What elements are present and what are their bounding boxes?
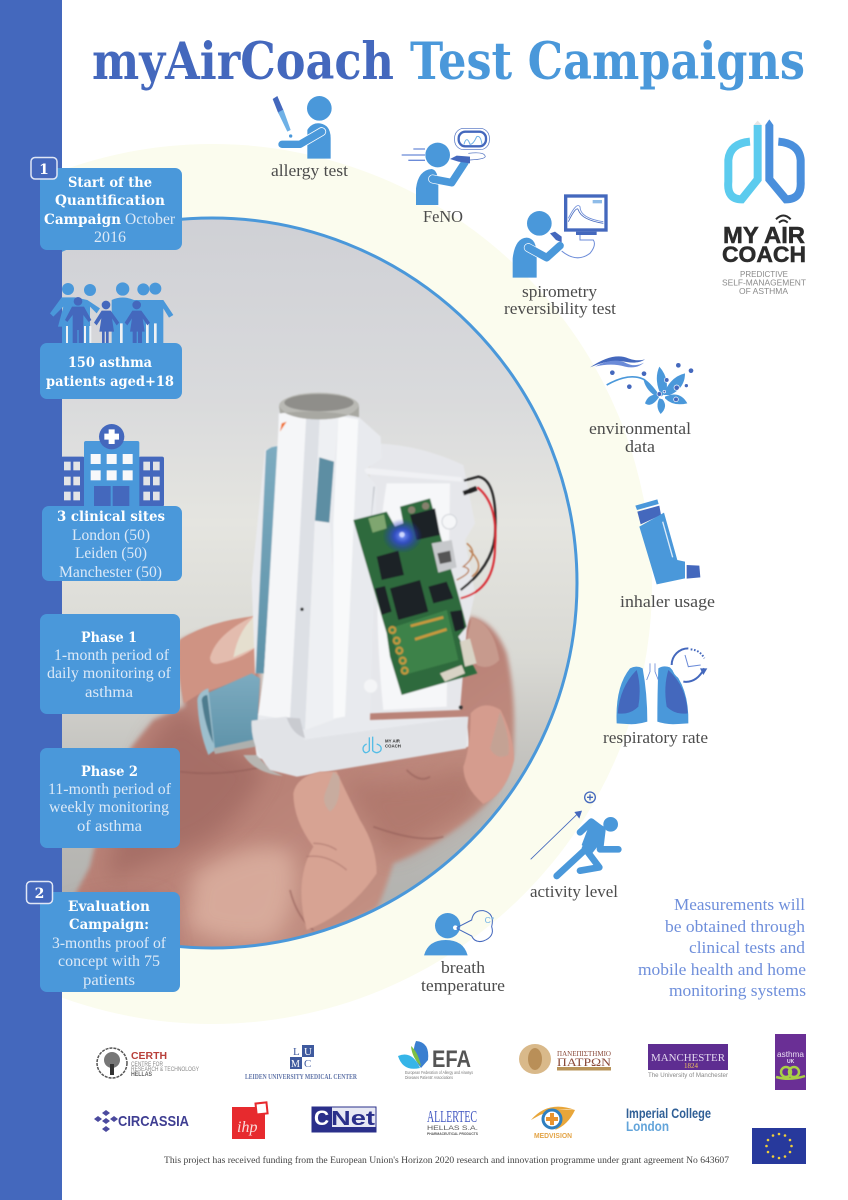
logo: asthma UK: asthma <box>777 1050 805 1059</box>
label: activity level: activity level <box>530 882 618 901</box>
panel: start of quantification campaign: Start of the <box>68 175 152 191</box>
panel: phase 1: asthma <box>85 684 133 701</box>
panel: phase 1: daily monitoring of <box>47 665 172 682</box>
logo: IHP <box>232 1102 268 1139</box>
icon: breath temperature <box>424 911 494 955</box>
logo: LUMC <box>245 1045 358 1081</box>
label: breath temperature <box>421 958 505 995</box>
photo: hand holding the smart inhaler <box>62 220 576 946</box>
icon: environmental data <box>590 356 693 414</box>
label: environmental data: data <box>625 437 656 456</box>
label: environmental data <box>589 419 691 456</box>
label: inhaler usage: inhaler usage <box>620 592 715 611</box>
title <box>92 32 805 92</box>
panel: start of quantification campaign: October <box>125 211 176 228</box>
pale yellow background circle <box>0 144 652 1024</box>
label: spirometry reversibility test: reversibility test <box>504 299 616 318</box>
logo: MyAirCoach: MY AIR <box>723 222 805 248</box>
panel: phase 2: of asthma <box>77 818 142 835</box>
logo: University of Patras: ΠΑΤΡΩΝ <box>557 1055 611 1069</box>
logo: MyAirCoach: OF ASTHMA <box>739 286 788 296</box>
logo: CERTH <box>97 1048 199 1078</box>
label: environmental data: environmental <box>589 419 691 438</box>
logo: Allertec: HELLAS S.A. <box>427 1125 478 1132</box>
logo: Circassia <box>94 1110 189 1132</box>
panel: 150 asthma patients <box>40 343 182 399</box>
panel: clinical sites: Manchester (50) <box>59 564 162 581</box>
panel: clinical sites: London (50) <box>72 527 150 544</box>
panel: 150 asthma patients: patients aged+18 <box>46 374 174 390</box>
text block: measurements: mobile health and home <box>638 960 806 979</box>
label: breath temperature: temperature <box>421 976 505 995</box>
logo: IHP: ihp <box>237 1119 257 1136</box>
badge: 2: 2 <box>35 886 44 902</box>
panel: evaluation campaign: concept with 75 <box>58 953 160 970</box>
icon: inhaler <box>635 499 700 584</box>
icon: breath temperature: C° <box>485 915 494 925</box>
logo: Medvision <box>531 1107 575 1140</box>
photo: hand <box>60 616 514 953</box>
logo: MyAirCoach <box>722 119 806 296</box>
logo: MyAirCoach: SELF-MANAGEMENT <box>722 278 806 288</box>
panel: evaluation campaign: Evaluation <box>68 899 150 915</box>
logo: LUMC: M <box>291 1059 300 1070</box>
logo: Imperial College London: Imperial College <box>626 1105 711 1121</box>
title: myAirCoach <box>92 32 394 92</box>
logo: Circassia: CIRCASSIA <box>118 1113 189 1130</box>
funding statement: This project has received funding from the European Union's Horizon 2020 research and innovation programme under grant agreement No 643607 <box>164 1155 729 1166</box>
panel: evaluation campaign <box>40 892 180 992</box>
text block: measurements: be obtained through <box>665 917 806 936</box>
label: allergy test: allergy test <box>271 161 348 180</box>
logo: EFA: Diseases Patients' Associations <box>405 1075 454 1080</box>
icon: allergy test <box>273 96 332 159</box>
logo: Medvision: MEDVISION <box>534 1133 572 1140</box>
panel: phase 1: Phase 1 <box>81 630 137 646</box>
panel: start of quantification campaign: Campaign <box>44 212 121 228</box>
logo: LUMC: U <box>304 1046 312 1058</box>
logo: MyAirCoach: COACH <box>722 242 806 267</box>
logo: asthma UK <box>775 1034 806 1090</box>
icon: activity runner with arrow <box>531 792 618 876</box>
panel: evaluation campaign: patients <box>83 972 135 989</box>
logo: University of Manchester: 1824 <box>684 1062 698 1070</box>
label: respiratory rate: respiratory rate <box>603 728 708 747</box>
text block: measurements: Measurements will <box>674 895 805 914</box>
logo: Allertec <box>427 1107 478 1136</box>
label: spirometry reversibility test <box>504 282 616 318</box>
photo: inhaler device <box>197 393 495 777</box>
panel: phase 1 <box>40 614 180 714</box>
panel: phase 2: 11-month period of <box>48 781 172 798</box>
logo: University of Patras <box>519 1044 612 1074</box>
logo: CERTH: CERTH <box>131 1050 167 1062</box>
panel: phase 2: Phase 2 <box>81 764 138 780</box>
icon: family group <box>50 282 173 343</box>
panel: phase 2: weekly monitoring <box>49 799 169 816</box>
left blue side bar <box>0 0 62 1200</box>
logo: Allertec: PHARMACEUTICAL PRODUCTS <box>427 1131 478 1136</box>
logo: LUMC: C <box>304 1058 311 1070</box>
panel: start of quantification campaign <box>40 168 182 250</box>
logo: CERTH: CENTRE FOR <box>131 1062 164 1068</box>
label: spirometry reversibility test: spirometry <box>522 282 598 301</box>
icon: lungs and clock <box>616 648 707 724</box>
icon: FeNO <box>402 128 489 205</box>
logo: University of Manchester: The University of Manchester <box>648 1072 729 1079</box>
icon: spirometry <box>513 196 606 278</box>
logo: EFA: EFA <box>432 1046 471 1073</box>
small logo printed on the device <box>363 737 401 753</box>
panel: start of quantification campaign: 2016 <box>94 229 126 246</box>
panel: 150 asthma patients: 150 asthma <box>68 355 152 371</box>
logo: LUMC: L <box>293 1046 300 1058</box>
panel: evaluation campaign: 3-months proof of <box>52 935 167 952</box>
logo: EFA: European Federation of Allergy and Airways <box>405 1070 474 1075</box>
logo: University of Manchester <box>648 1044 729 1079</box>
text block: measurements: clinical tests and <box>689 938 806 957</box>
logo: asthma UK: UK <box>787 1059 795 1065</box>
panel: start of quantification campaign: Quantification <box>55 193 165 209</box>
logo: LUMC: LEIDEN UNIVERSITY MEDICAL CENTER <box>245 1073 358 1081</box>
logo: EFA <box>398 1041 474 1080</box>
logo: Imperial College London: London <box>626 1118 669 1134</box>
logo: Allertec: ALLERTEC <box>427 1107 477 1126</box>
badge: 1: 1 <box>39 162 49 178</box>
panel: evaluation campaign: Campaign: <box>69 917 149 933</box>
badge: 1 <box>31 158 57 179</box>
label: FeNO: FeNO <box>423 207 463 226</box>
panel: clinical sites: 3 clinical sites <box>57 509 165 525</box>
text block: measurements <box>638 895 806 1000</box>
panel: clinical sites <box>42 506 182 581</box>
label: breath temperature: breath <box>441 958 486 977</box>
logo: University of Patras: ΠΑΝΕΠΙΣΤΗΜΙΟ <box>557 1049 612 1058</box>
small logo printed on the device: COACH <box>385 743 401 748</box>
text block: measurements: monitoring systems <box>669 981 806 1000</box>
panel: clinical sites: Leiden (50) <box>75 545 147 562</box>
badge: 2 <box>26 882 52 904</box>
logo: CERTH: HELLAS <box>131 1072 152 1078</box>
small logo printed on the device: MY AIR <box>385 739 401 744</box>
panel: phase 2 <box>40 748 180 848</box>
logo: Imperial College London <box>626 1105 711 1134</box>
panel: phase 1: 1-month period of <box>54 647 170 664</box>
icon: hospital <box>61 424 164 508</box>
photo: front fingers <box>293 705 514 930</box>
logo: CNet: C <box>314 1107 329 1130</box>
logo: University of Manchester: MANCHESTER <box>651 1052 726 1064</box>
logo: CERTH: RESEARCH & TECHNOLOGY <box>131 1067 199 1073</box>
logo: EU flag <box>752 1128 806 1164</box>
logo: MyAirCoach: PREDICTIVE <box>740 269 788 279</box>
logo: CNet: Net <box>331 1108 375 1130</box>
logo: CNet <box>312 1107 376 1132</box>
